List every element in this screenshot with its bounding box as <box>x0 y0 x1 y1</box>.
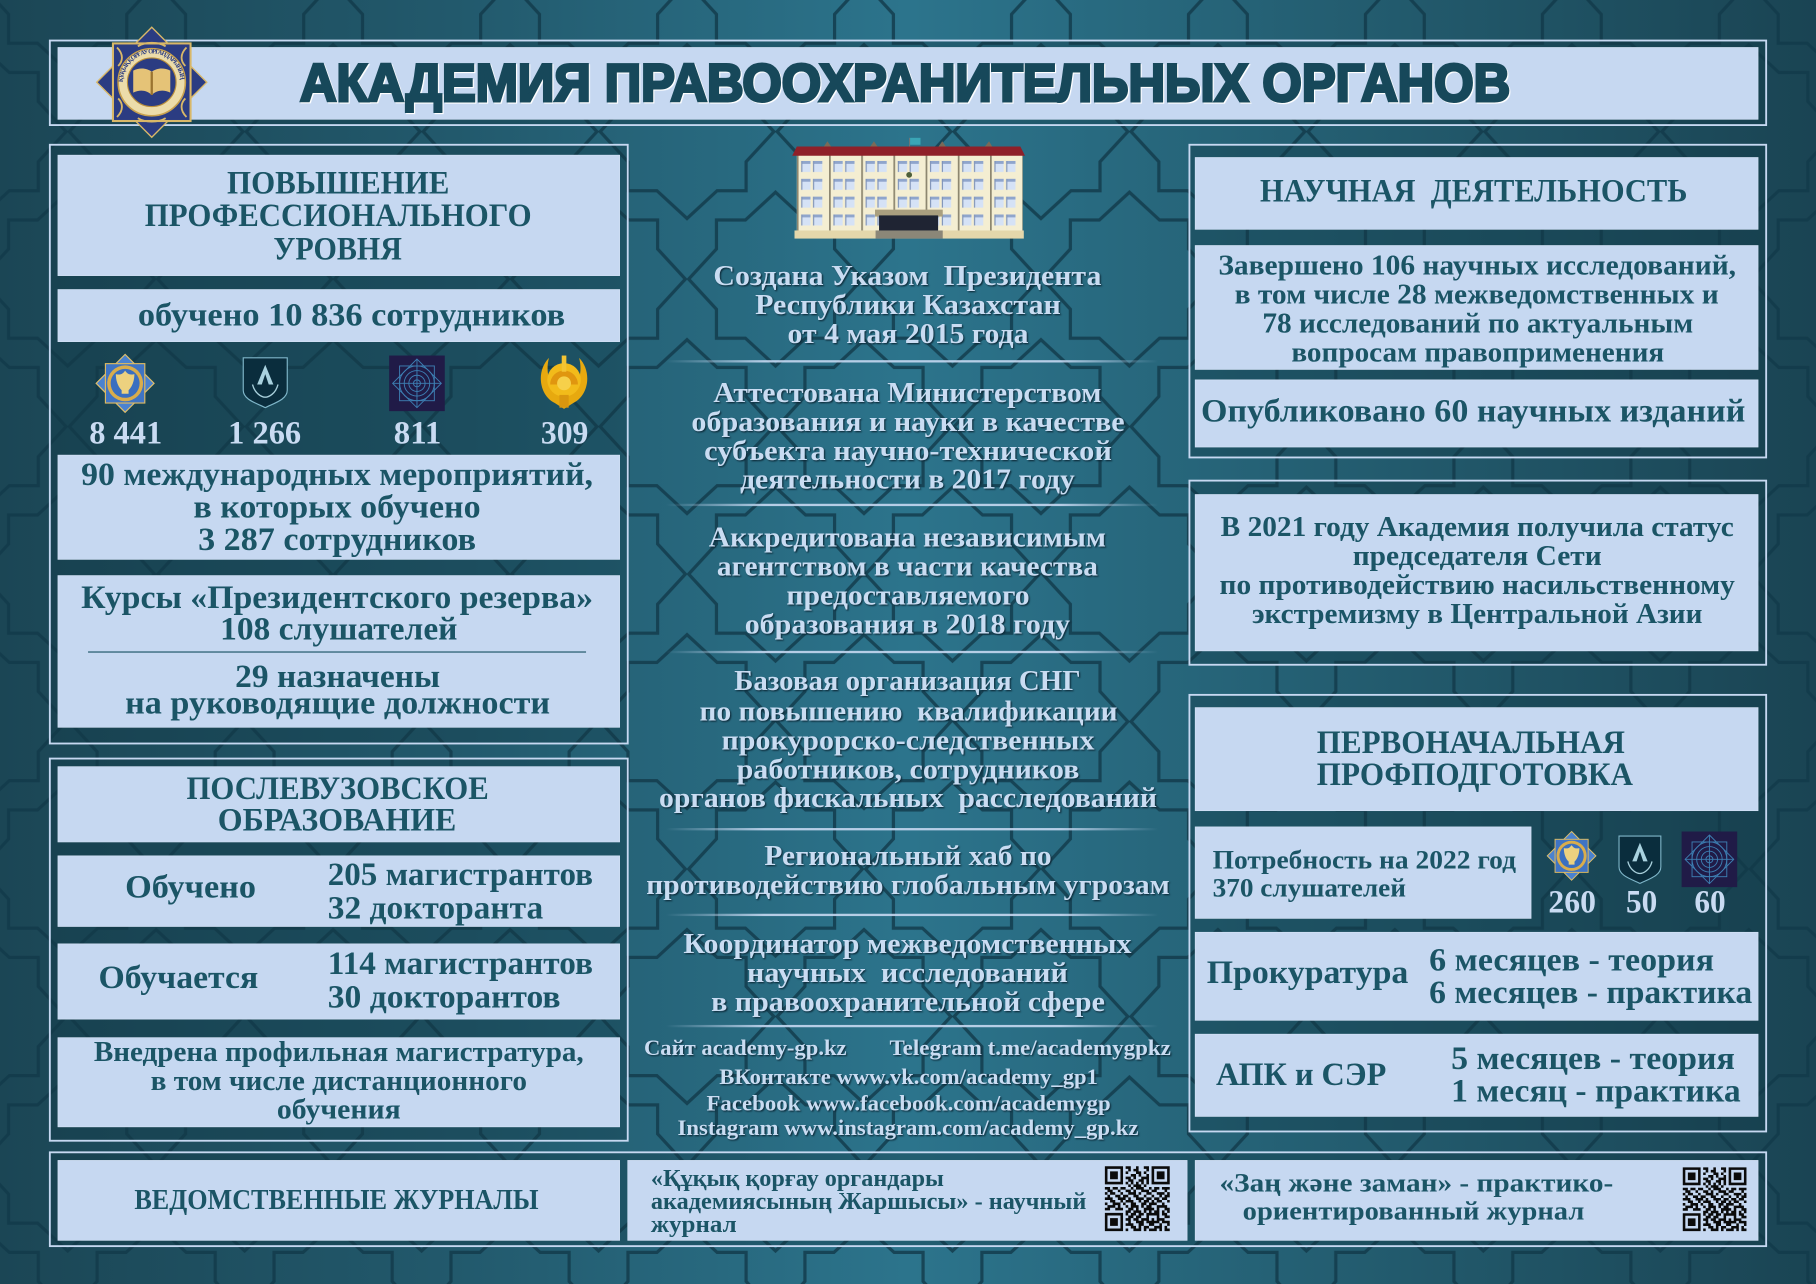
icon: QR code <box>1105 1168 1170 1230</box>
title banner <box>50 41 1766 125</box>
demand box: 370 слушателей <box>1213 872 1406 902</box>
international events box: 90 международных мероприятий, <box>81 457 593 493</box>
text: accreditation: образования в 2018 году <box>745 608 1071 640</box>
journal one box: «Құқық қорғау органдары <box>651 1165 944 1192</box>
profile masters box: обучения <box>277 1094 401 1126</box>
text: research coordinator <box>683 928 1132 1018</box>
international events box <box>58 455 620 559</box>
icon: purple square <box>389 356 445 411</box>
studying box: 30 докторантов <box>328 980 561 1016</box>
APK and SER box <box>1195 1034 1758 1116</box>
text: accreditation: агентством в части качества <box>717 551 1098 583</box>
heading box: ПРОФЕССИОНАЛЬНОГО <box>145 198 532 234</box>
text: attestation: образования и науки в качестве <box>691 406 1125 438</box>
demand box <box>1195 827 1531 918</box>
text: attestation: Аттестована Министерством <box>713 377 1101 409</box>
presidential reserve box <box>58 576 620 727</box>
text: founding decree: Создана Указом Президента <box>713 260 1102 292</box>
panel: initial professional training <box>1189 695 1766 1131</box>
heading box: ПЕРВОНАЧАЛЬНАЯ <box>1317 725 1625 761</box>
icon numbers: 811 <box>394 416 441 452</box>
icon: gold emblem <box>541 356 587 409</box>
panel: postgraduate education <box>50 759 628 1141</box>
publications box <box>1195 380 1758 447</box>
heading box <box>58 155 620 276</box>
text: contact links: ВКонтакте www.vk.com/academy_gp1 <box>719 1064 1098 1089</box>
icon: shield small <box>1619 836 1661 883</box>
heading box <box>58 767 620 842</box>
research completed box <box>1195 246 1758 369</box>
text: CIS base organization: Базовая организация СНГ <box>734 665 1081 697</box>
publications box: Опубликовано 60 научных изданий <box>1201 394 1745 430</box>
profile masters box <box>58 1036 620 1127</box>
trained total box <box>58 290 620 342</box>
text: founding decree <box>713 260 1102 350</box>
text: regional hub: Региональный хаб по <box>764 840 1052 872</box>
text: CIS base organization: органов фискальных расследований <box>659 782 1157 814</box>
heading box: ОБРАЗОВАНИЕ <box>218 802 456 838</box>
panel: departmental journals <box>50 1152 1766 1246</box>
text: CIS base organization: прокурорско-следственных <box>722 724 1095 756</box>
icon: shield <box>243 358 287 408</box>
prosecution box <box>1195 932 1758 1020</box>
graduated box: 205 магистрантов <box>328 857 593 893</box>
heading box: ПОСЛЕВУЗОВСКОЕ <box>186 771 489 807</box>
panel: professional development <box>50 145 628 744</box>
international events box: в которых обучено <box>193 490 481 526</box>
APK and SER box: 5 месяцев - теория <box>1451 1041 1735 1077</box>
heading box: ПРОФПОДГОТОВКА <box>1317 757 1634 793</box>
panel: network chairmanship: экстремизму в Центральной Азии <box>1252 598 1702 630</box>
heading box <box>1195 708 1758 811</box>
presidential reserve box: 108 слушателей <box>220 611 457 647</box>
center column text <box>644 260 1171 1140</box>
research completed box: Завершено 106 научных исследований, <box>1218 249 1736 281</box>
demand box: Потребность на 2022 год <box>1213 845 1517 875</box>
icon numbers <box>89 416 588 452</box>
graduated box: Обучено <box>125 870 256 906</box>
text: attestation <box>691 377 1125 496</box>
text: attestation: деятельности в 2017 году <box>740 464 1075 496</box>
text: accreditation: предоставляемого <box>786 580 1030 612</box>
demand numbers <box>1548 885 1726 921</box>
text: research coordinator: научных исследований <box>747 957 1068 989</box>
demand numbers: 60 <box>1694 885 1726 921</box>
journal one box: журнал <box>651 1211 737 1238</box>
text: contact links: Сайт academy-gp.kz <box>644 1035 847 1060</box>
text: contact links: Facebook www.facebook.com/academygp <box>706 1091 1111 1116</box>
heading box <box>1195 158 1758 229</box>
text: CIS base organization <box>659 665 1157 814</box>
text: regional hub: противодействию глобальным угрозам <box>646 869 1170 901</box>
graduated box <box>58 856 620 926</box>
icon numbers: 309 <box>541 416 588 452</box>
icon: academy building <box>792 138 1025 239</box>
icon numbers: 8 441 <box>89 416 162 452</box>
text: attestation: субъекта научно-технической <box>704 435 1112 467</box>
research completed box: 78 исследований по актуальным <box>1262 307 1693 339</box>
studying box: 114 магистрантов <box>328 946 593 982</box>
prosecution box: 6 месяцев - теория <box>1429 942 1714 978</box>
presidential reserve box: Курсы «Президентского резерва» <box>81 580 593 616</box>
journal one box: академиясының Жаршысы» - научный <box>651 1188 1086 1215</box>
text: CIS base organization: по повышению квалификации <box>700 695 1118 727</box>
text: contact links: Instagram www.instagram.com/academy_gp.kz <box>678 1115 1139 1140</box>
research completed box: в том числе 28 межведомственных и <box>1235 278 1719 310</box>
text: research coordinator: Координатор межведомственных <box>683 928 1132 960</box>
title text: АКАДЕМИЯ ПРАВООХРАНИТЕЛЬНЫХ ОРГАНОВ <box>300 54 1510 113</box>
icon: prosecutors medal <box>96 354 154 412</box>
journal two box: ориентированный журнал <box>1243 1195 1584 1225</box>
journal one box <box>628 1160 1187 1240</box>
panel: network chairmanship: председателя Сети <box>1353 540 1602 572</box>
icon: QR code <box>1683 1169 1746 1230</box>
text: CIS base organization: работников, сотрудников <box>737 753 1079 785</box>
icon: academy emblem <box>96 26 208 138</box>
panel: scientific activity <box>1189 145 1766 457</box>
panel: network chairmanship: по противодействию насильственному <box>1220 569 1735 601</box>
demand numbers: 50 <box>1626 885 1657 921</box>
heading box: НАУЧНАЯ ДЕЯТЕЛЬНОСТЬ <box>1260 174 1687 210</box>
text: regional hub <box>646 840 1170 901</box>
profile masters box: в том числе дистанционного <box>151 1065 527 1097</box>
international events box: 3 287 сотрудников <box>198 522 476 558</box>
icon numbers: 1 266 <box>228 416 301 452</box>
icon: prosecutors medal small <box>1547 832 1596 880</box>
journal two box <box>1195 1160 1758 1240</box>
text: founding decree: от 4 мая 2015 года <box>788 318 1029 350</box>
panel: network chairmanship: В 2021 году Академия получила статус <box>1221 511 1734 543</box>
text: accreditation: Аккредитована независимым <box>709 522 1106 554</box>
profile masters box: Внедрена профильная магистратура, <box>94 1036 584 1068</box>
studying box: Обучается <box>98 960 258 996</box>
text: contact links: Telegram t.me/academygpkz <box>889 1035 1171 1060</box>
text: accreditation <box>709 522 1106 640</box>
trained total box: обучено 10 836 сотрудников <box>138 297 565 333</box>
icon: purple square small <box>1682 832 1737 887</box>
presidential reserve box: на руководящие должности <box>125 685 550 721</box>
APK and SER box: АПК и СЭР <box>1216 1057 1386 1093</box>
presidential reserve box: 29 назначены <box>235 659 440 695</box>
prosecution box: 6 месяцев - практика <box>1429 975 1752 1011</box>
heading box: УРОВНЯ <box>273 231 402 267</box>
APK and SER box: 1 месяц - практика <box>1451 1073 1741 1109</box>
journals label box <box>58 1160 620 1240</box>
studying box <box>58 944 620 1019</box>
icon: academy emblem: ҚҰҚЫҚ ҚОРҒАУ ОРГАНДАРЫНЫҢ <box>118 49 185 82</box>
prosecution box: Прокуратура <box>1207 955 1408 991</box>
panel: network chairmanship <box>1189 481 1766 665</box>
research completed box: вопросам правоприменения <box>1291 336 1664 368</box>
graduated box: 32 докторанта <box>328 890 543 926</box>
text: research coordinator: в правоохранительной сфере <box>711 986 1105 1018</box>
journal two box: «Заң және заман» - практико- <box>1220 1168 1613 1198</box>
demand numbers: 260 <box>1548 885 1596 921</box>
journals label box: ВЕДОМСТВЕННЫЕ ЖУРНАЛЫ <box>134 1184 539 1216</box>
text: contact links <box>644 1035 1171 1140</box>
text: founding decree: Республики Казахстан <box>755 289 1061 321</box>
heading box: ПОВЫШЕНИЕ <box>227 165 449 201</box>
